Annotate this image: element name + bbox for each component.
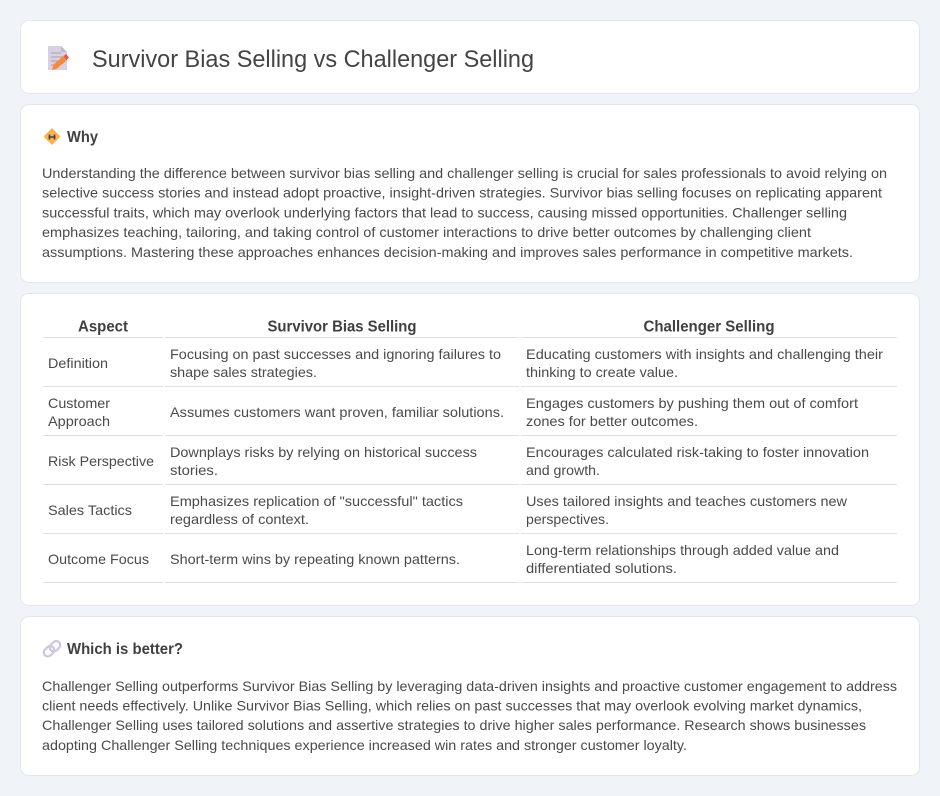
text block: which is better paragraph: adopting Challenger Selling techniques experience increased win rates and stronger customer loyalty. [42,737,687,753]
panel: comparison table [20,294,920,606]
table header row: Survivor Bias Selling [268,319,416,336]
table row: risk perspective: stories. [170,462,218,478]
table row: outcome focus: differentiated solutions. [526,560,677,576]
text block: why paragraph: emphasizes teaching, tailoring, and taking control of customer interactions to drive better outcomes by challenging client [42,224,811,240]
table row: risk perspective: and growth. [526,462,600,478]
table header row [43,319,897,338]
table row: outcome focus: Long-term relationships through added value and [526,542,839,558]
icon: warning diamond [44,129,60,144]
panel: which is better [20,616,920,776]
table row: outcome focus: Short-term wins by repeating known patterns. [170,551,460,567]
table row: sales tactics: Emphasizes replication of "successful" tactics [170,493,463,509]
table row: definition [43,346,897,387]
table header row: Aspect [78,319,129,336]
table row: definition: shape sales strategies. [170,364,317,380]
table row: risk perspective [43,444,897,485]
table row: definition: Definition [48,355,108,371]
heading: which is better: Which is better? [67,641,183,658]
text block: which is better paragraph: client needs effectively. Unlike Survivor Bias Selling, which relies on past successes that may overlook evolving market dynamics, [42,698,862,714]
table row: sales tactics [43,493,897,534]
table row: risk perspective: Encourages calculated risk-taking to foster innovation [526,444,869,460]
table header row: Challenger Selling [644,319,774,336]
text block: why paragraph: Understanding the difference between survivor bias selling and challenger selling is crucial for sales professionals to avoid relying on [42,165,887,181]
table row: definition: thinking to create value. [526,364,678,380]
table row: sales tactics: regardless of context. [170,511,309,527]
title: Survivor Bias Selling vs Challenger Selling [92,46,534,73]
panel: why [20,104,920,282]
table row: risk perspective: Downplays risks by relying on historical success [170,444,477,460]
icon: chain link [42,639,62,658]
table row: sales tactics: Uses tailored insights and teaches customers new [526,493,848,509]
text block: why paragraph: successful traits, which may overlook underlying factors that lead to success, causing missed opportunities. Challenger selling [42,204,847,220]
table row: sales tactics: perspectives. [526,511,609,527]
table row: customer approach: Engages customers by pushing them out of comfort [526,395,858,411]
text block: which is better paragraph: Challenger Selling uses tailored solutions and assertive strategies to drive higher sales performance. Research shows businesses [42,717,866,733]
heading: why: Why [67,129,98,146]
table row: outcome focus: Outcome Focus [48,551,149,567]
table row: definition: Educating customers with insights and challenging their [526,346,883,362]
text block: which is better paragraph [42,678,897,753]
text block: which is better paragraph: Challenger Selling outperforms Survivor Bias Selling by leveraging data-driven insights and proactive customer engagement to address [42,678,897,694]
table row: customer approach [43,395,897,436]
table row: definition: Focusing on past successes and ignoring failures to [170,346,501,362]
icon: document with pencil [48,46,69,70]
table row: sales tactics: Sales Tactics [48,502,132,518]
table row: customer approach: zones for better outcomes. [526,413,698,429]
table row: customer approach: Assumes customers want proven, familiar solutions. [170,404,504,420]
table row: outcome focus [43,542,897,583]
panel: header [20,20,920,94]
text block: why paragraph [42,165,887,260]
text block: why paragraph: assumptions. Mastering these approaches enhances decision-making and improves sales performance in competitive markets. [42,244,853,260]
table row: customer approach: Approach [48,413,110,429]
text block: why paragraph: selective success stories and instead adopt proactive, insight-driven strategies. Survivor bias selling focuses on replicating apparent [42,184,882,200]
table row: risk perspective: Risk Perspective [48,453,154,469]
table row: customer approach: Customer [48,395,110,411]
